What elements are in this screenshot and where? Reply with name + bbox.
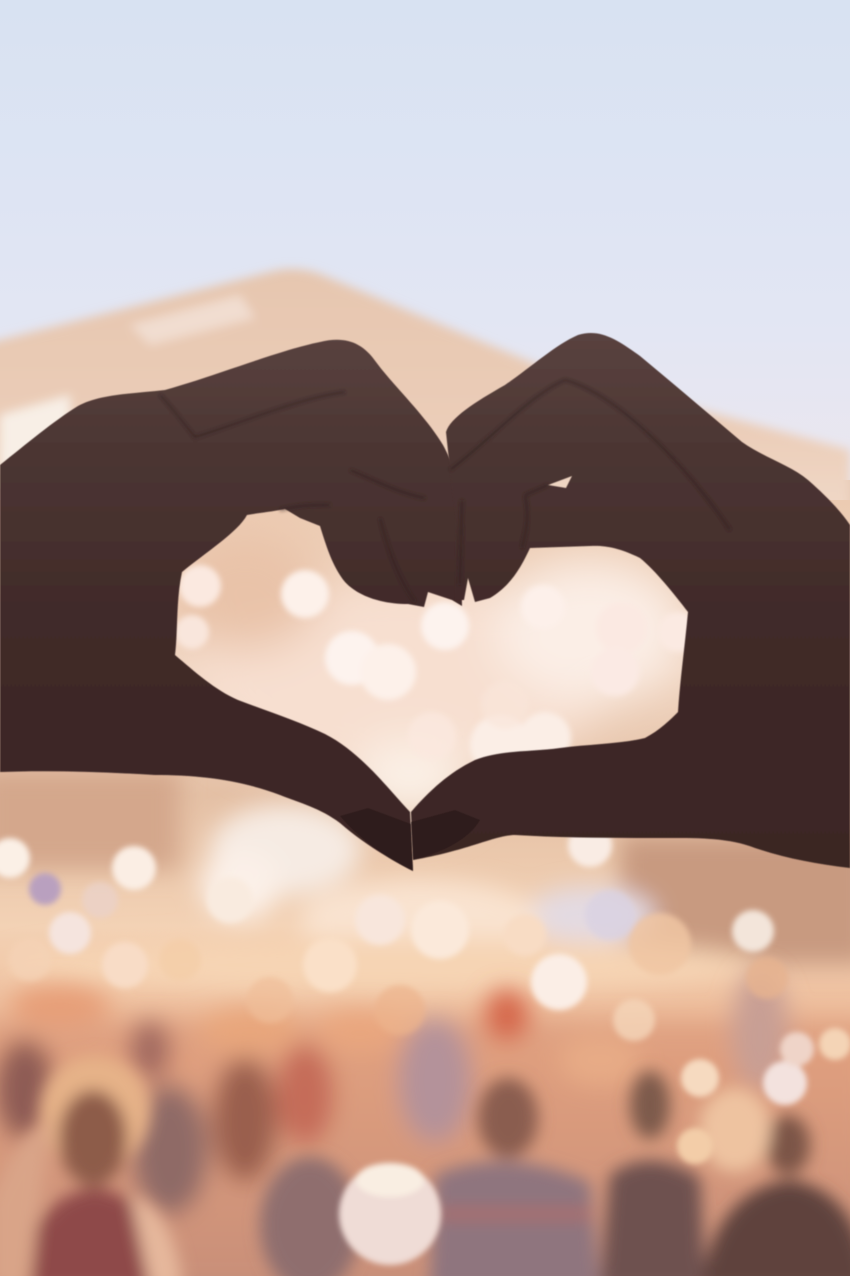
- stage roof: [0, 269, 850, 620]
- stage and crowd glow background: [0, 500, 850, 1276]
- left fingertip nail: [340, 808, 413, 871]
- right hand silhouette: [411, 333, 850, 868]
- left finger creases: [160, 392, 425, 602]
- bokeh lights inside heart: [175, 565, 698, 775]
- left hand silhouette: [0, 340, 462, 871]
- foreground white bokeh orb: [339, 1163, 441, 1265]
- crowd silhouettes: [0, 970, 850, 1276]
- foreground people: [0, 1056, 850, 1276]
- stage glow band under hands: [0, 770, 850, 993]
- right fingertip nail: [411, 810, 480, 860]
- glow inside heart: [170, 530, 685, 820]
- bokeh lights over crowd: [0, 823, 850, 1164]
- right finger creases: [450, 380, 730, 585]
- sky background: [0, 0, 850, 480]
